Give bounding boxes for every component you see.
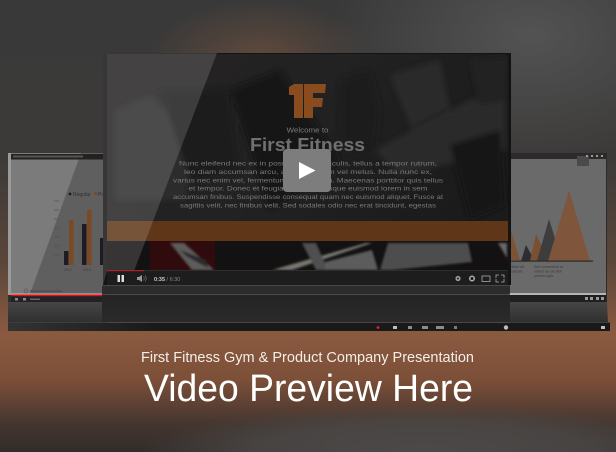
left slide bar chart <box>54 192 104 272</box>
body paragraph: varius nec enim vel, fermentum rutrum enim. Maecenas porttitor quis tellus <box>173 178 444 184</box>
video dumbbell backdrop <box>107 54 508 271</box>
left slide mockup <box>8 153 108 331</box>
left slide bar chart: 100 <box>54 253 59 257</box>
left slide bar chart: 0 <box>55 262 57 266</box>
body paragraph: Nunc eleifend nec ex in posuere. Nunc iaculis, tellus a tempor rutrum, <box>179 160 437 168</box>
right slide chart captions: nsequat <box>510 270 522 274</box>
right slide triangle chart <box>503 190 593 264</box>
body paragraph: et tempor. Donec et feugiat nisi, scelerisque euismod lorem in sem <box>188 186 428 192</box>
left slide title bar <box>11 154 108 160</box>
welcome text: Welcome to <box>286 128 329 134</box>
body paragraph: accumsan finibus. Suspendisse consequat quam nec euismod aliquet. Fusce at <box>173 194 443 201</box>
centre monitor base <box>102 285 510 322</box>
orange band <box>107 221 508 241</box>
control bar <box>107 270 508 285</box>
volume icon <box>137 275 146 282</box>
left slide bar chart: 2012 <box>64 268 72 272</box>
left slide bar chart: Regular <box>73 192 91 198</box>
body paragraph: sagittis velit, nec finibus velit. Sed sodales odio nec erat tincidunt, egestas <box>180 202 437 210</box>
left slide bar chart: 600 <box>54 208 59 212</box>
right slide stand <box>508 302 608 323</box>
body paragraph: leo diam accumsan arcu, a laoreet enim vel metus. Nulla nunc ex, <box>184 169 432 176</box>
left slide diagonal shade <box>30 153 108 294</box>
subtitle: First Fitness Gym & Product Company Presentation <box>141 349 474 366</box>
left slide stand <box>8 302 108 323</box>
player right icons <box>455 275 504 282</box>
right slide chart captions <box>510 265 563 278</box>
left slide bar chart: 200 <box>54 244 59 248</box>
play button <box>283 149 331 192</box>
left slide bar chart: Pr <box>98 192 103 198</box>
photo strip with dumbbells <box>107 241 508 271</box>
right slide chart captions: Sed consectetur ut <box>534 265 563 269</box>
centre video player <box>103 53 511 285</box>
left slide bar chart: 700 <box>54 199 59 203</box>
left slide bar chart: 500 <box>54 217 59 221</box>
pause icon <box>118 275 124 282</box>
right slide mockup <box>503 153 608 323</box>
right slide chart captions: rutrum leo an nibh <box>534 270 562 274</box>
right slide chart captions: pretium quis <box>534 274 553 278</box>
left slide footer and red bar <box>11 289 108 302</box>
logo 1F <box>289 84 326 118</box>
time: 0:35 / 6:30 <box>154 277 180 283</box>
left slide bar chart: 300 <box>54 235 59 239</box>
body paragraph <box>173 160 444 210</box>
main title: Video Preview Here <box>144 368 473 410</box>
right slide bottom controls <box>508 155 606 302</box>
right slide chart captions: ctetur elit <box>510 265 524 269</box>
taskbar strip <box>8 322 610 331</box>
glass reflection <box>103 53 217 285</box>
left slide bar chart: 400 <box>54 226 59 230</box>
heading: First Fitness <box>250 135 365 155</box>
left slide bar chart: 2013 <box>83 268 91 272</box>
